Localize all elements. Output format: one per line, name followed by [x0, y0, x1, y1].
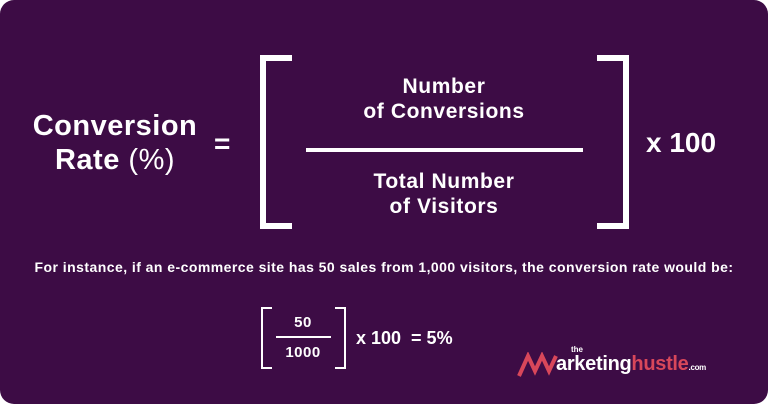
- big left bracket: [260, 55, 292, 229]
- big right bracket: [597, 55, 629, 229]
- example formula: [261, 307, 453, 369]
- denominator: of Visitors: [390, 195, 498, 218]
- left label: Conversion: [33, 110, 197, 142]
- left label: [33, 110, 197, 176]
- denominator: [374, 170, 514, 218]
- x 100: x 100: [646, 127, 716, 158]
- fraction line: [306, 148, 583, 152]
- logo: [517, 345, 706, 377]
- numerator: Number: [403, 75, 485, 98]
- logo: arketinghustle.com: [556, 353, 706, 375]
- example formula: 50: [294, 314, 312, 331]
- example formula: 1000: [285, 344, 321, 361]
- numerator: of Conversions: [363, 100, 525, 123]
- denominator: Total Number: [374, 170, 514, 193]
- example sentence: For instance, if an e-commerce site has 50 sales from 1,000 visitors, the conversion rate would be:: [35, 259, 733, 275]
- logo: the: [571, 345, 583, 354]
- left label: Rate (%): [55, 144, 175, 176]
- example formula: x 100 = 5%: [356, 328, 453, 348]
- numerator: [363, 75, 525, 123]
- equals: =: [214, 128, 230, 159]
